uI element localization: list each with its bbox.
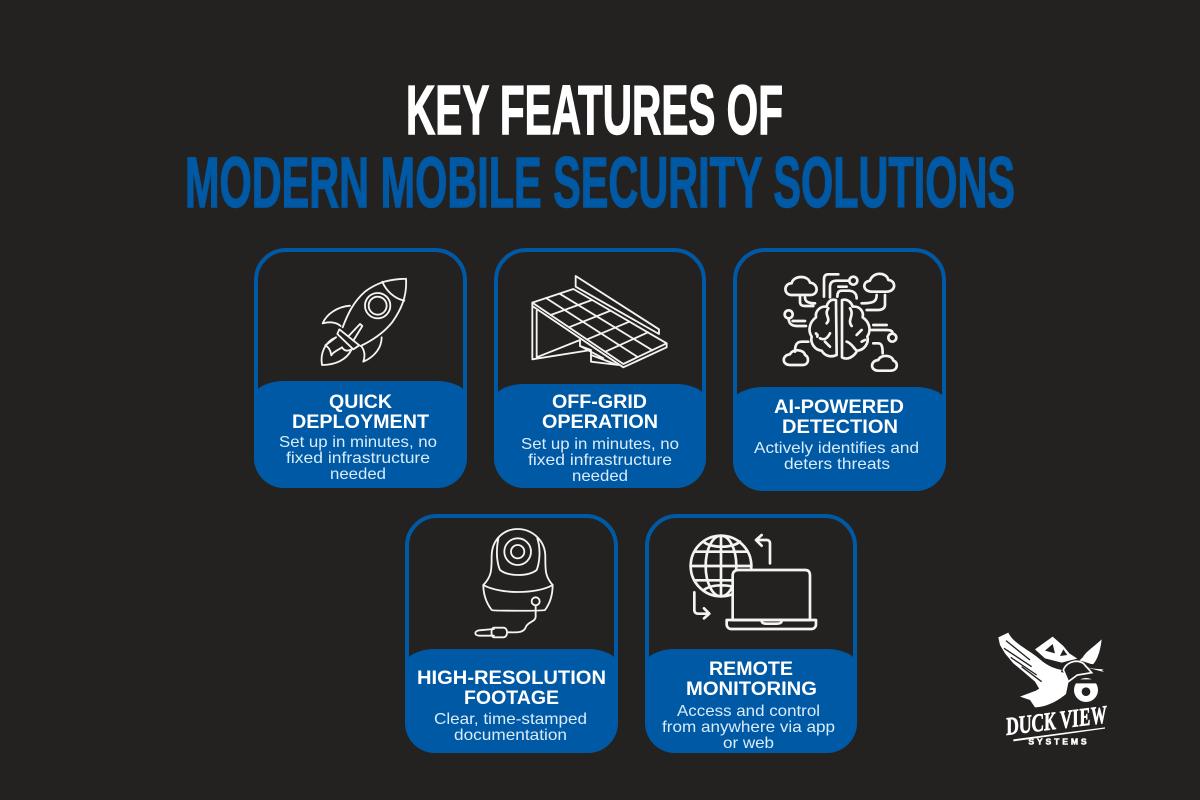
description: fixed infrastructure [286, 450, 430, 467]
panel: off-grid operation: OPERATION [542, 411, 658, 433]
description [754, 440, 919, 473]
panel: ai-powered detection: DETECTION [782, 416, 898, 438]
panel: remote monitoring [645, 516, 857, 753]
description: Set up in minutes, no [521, 436, 679, 453]
description [434, 711, 587, 744]
description [662, 703, 835, 752]
description: documentation [454, 727, 567, 744]
heading: HIGH-RESOLUTION [417, 667, 606, 689]
panel: remote monitoring: MONITORING [686, 678, 817, 700]
panel: off-grid operation [494, 250, 706, 488]
icon: solar panel [532, 276, 667, 367]
description: from anywhere via app [662, 719, 835, 736]
description [279, 434, 437, 483]
icon: rocket [322, 279, 406, 365]
description [521, 436, 679, 485]
icon: ai brain [784, 274, 897, 371]
panel: quick deployment: DEPLOYMENT [292, 411, 429, 433]
description: needed [330, 466, 386, 483]
description: Set up in minutes, no [279, 434, 437, 451]
wordmark: DUCK VIEW [1003, 701, 1109, 741]
description: fixed infrastructure [528, 452, 672, 469]
heading: REMOTE [709, 658, 793, 680]
icon: globe and laptop [691, 535, 816, 629]
description: needed [572, 468, 628, 485]
title: KEY FEATURES OF [406, 71, 783, 149]
heading: OFF-GRID [552, 391, 647, 413]
description: or web [723, 735, 774, 752]
heading: AI-POWERED [774, 396, 904, 418]
heading: QUICK [329, 391, 392, 413]
panel: high-resolution footage [405, 516, 618, 753]
icon: security camera [475, 529, 553, 637]
description: Clear, time-stamped [434, 711, 587, 728]
title [185, 71, 1015, 223]
description: Actively identifies and [754, 440, 919, 457]
description: deters threats [784, 456, 890, 473]
logo: duck view systems [998, 633, 1109, 746]
icon: duck with camera [998, 633, 1105, 741]
description: Access and control [677, 703, 820, 720]
panel: quick deployment [254, 250, 467, 488]
tagline: SYSTEMS [1028, 736, 1087, 746]
panel: high-resolution footage: FOOTAGE [464, 687, 559, 709]
panel: ai-powered detection [733, 250, 946, 491]
